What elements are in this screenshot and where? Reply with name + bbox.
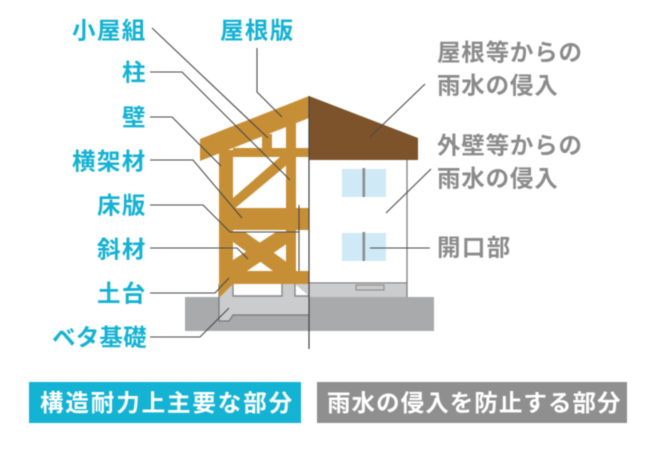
concrete slab foundation bbox=[185, 160, 434, 331]
label: 外壁等からの雨水の侵入: 雨水の侵入 bbox=[437, 166, 558, 192]
label: 斜材: 斜材 bbox=[97, 236, 147, 262]
legend: structural parts bbox=[29, 382, 301, 423]
legend: rainwater parts: 雨水の侵入を防止する部分 bbox=[327, 390, 622, 416]
window lower bbox=[342, 232, 386, 261]
legend: rainwater parts bbox=[317, 382, 627, 423]
label: 外壁等からの雨水の侵入 bbox=[437, 132, 583, 192]
label: 小屋組: 小屋組 bbox=[72, 18, 147, 44]
label: 横架材: 横架材 bbox=[72, 148, 147, 174]
label: 屋根等からの雨水の侵入: 雨水の侵入 bbox=[437, 72, 558, 98]
leader lines bbox=[150, 28, 431, 337]
label: 壁: 壁 bbox=[122, 104, 146, 130]
label: 床版: 床版 bbox=[97, 192, 147, 218]
label: 柱: 柱 bbox=[122, 60, 146, 86]
legend: structural parts: 構造耐力上主要な部分 bbox=[40, 390, 294, 416]
exterior brown roof bbox=[309, 96, 418, 160]
label: 屋根等からの雨水の侵入: 屋根等からの bbox=[437, 40, 583, 66]
label: 土台: 土台 bbox=[97, 280, 147, 306]
label: 屋根等からの雨水の侵入 bbox=[437, 40, 583, 98]
timber frame structure bbox=[200, 96, 309, 298]
window upper bbox=[342, 168, 386, 197]
label: 外壁等からの雨水の侵入: 外壁等からの bbox=[437, 132, 583, 158]
label: ベタ基礎: ベタ基礎 bbox=[52, 324, 147, 350]
label: 屋根版: 屋根版 bbox=[220, 18, 295, 44]
center divider line bbox=[308, 96, 310, 349]
label: 開口部: 開口部 bbox=[437, 234, 512, 260]
